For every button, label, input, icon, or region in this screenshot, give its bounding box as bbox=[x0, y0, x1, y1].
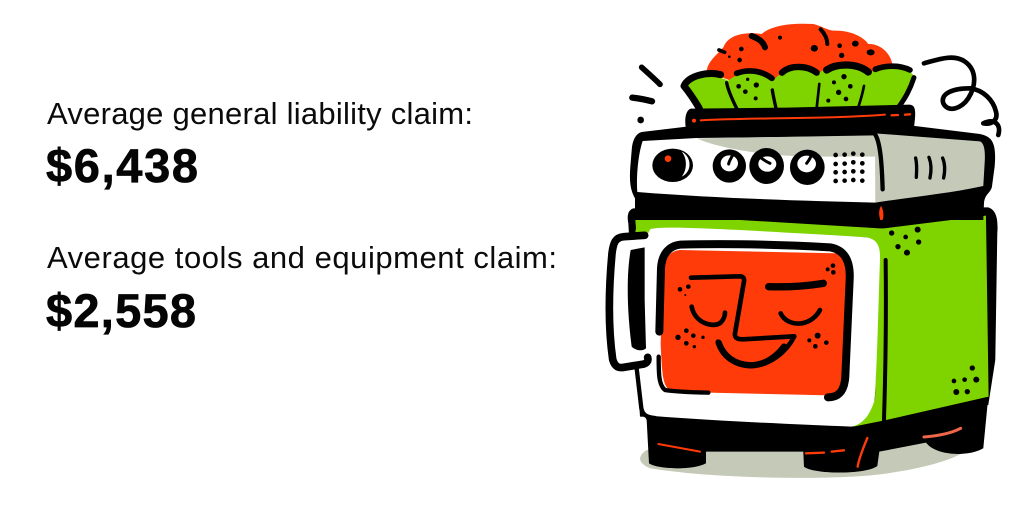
top control unit bbox=[630, 126, 995, 220]
eyes bbox=[692, 307, 725, 325]
stat: general liability bbox=[46, 96, 473, 192]
speaker dots bbox=[833, 151, 865, 183]
indicator dial bbox=[652, 149, 693, 182]
label: general liability claim: Average general liability claim: bbox=[47, 96, 473, 131]
red pie filling bbox=[707, 24, 893, 82]
tray red line bbox=[693, 114, 910, 122]
floor shadow bbox=[640, 440, 965, 478]
label: tools and equipment claim: Average tools and equipment claim: bbox=[47, 240, 557, 275]
green body bbox=[628, 207, 998, 423]
vent lines bbox=[916, 157, 945, 178]
face freckles bbox=[675, 263, 836, 349]
face bbox=[691, 276, 823, 366]
value: tools and equipment claim: $2,558 bbox=[46, 284, 196, 337]
white front panel bbox=[635, 228, 880, 427]
control unit outline bbox=[630, 126, 995, 220]
lower body and feet bbox=[609, 207, 998, 473]
red screen bbox=[661, 250, 850, 395]
screen outline bbox=[659, 244, 850, 397]
body corner line bbox=[884, 260, 886, 420]
seam mark bbox=[879, 206, 883, 220]
pie speckles bbox=[728, 36, 875, 103]
panel lower-left outline bbox=[637, 368, 655, 418]
base and feet bbox=[640, 397, 988, 473]
mouth thickening bbox=[719, 343, 784, 365]
lid tray and pie bbox=[632, 24, 999, 135]
crust outlines bbox=[684, 29, 914, 108]
sparkle marks bbox=[632, 67, 660, 123]
base red highlights bbox=[658, 428, 961, 467]
green pie crust bbox=[687, 66, 915, 109]
illustration: smiling microwave oven bbox=[609, 24, 999, 478]
gray shade on panel bbox=[697, 135, 877, 157]
knobs bbox=[713, 148, 825, 185]
brows and nose bbox=[691, 276, 794, 366]
squiggle steam bbox=[924, 58, 999, 135]
panel divider bbox=[875, 135, 883, 189]
lid tray bbox=[685, 105, 915, 129]
door handle bbox=[609, 235, 653, 368]
value: general liability claim: $6,438 bbox=[46, 139, 198, 192]
stat: tools and equipment bbox=[46, 240, 557, 337]
white panel bbox=[637, 136, 883, 203]
body speckles bbox=[889, 227, 979, 395]
